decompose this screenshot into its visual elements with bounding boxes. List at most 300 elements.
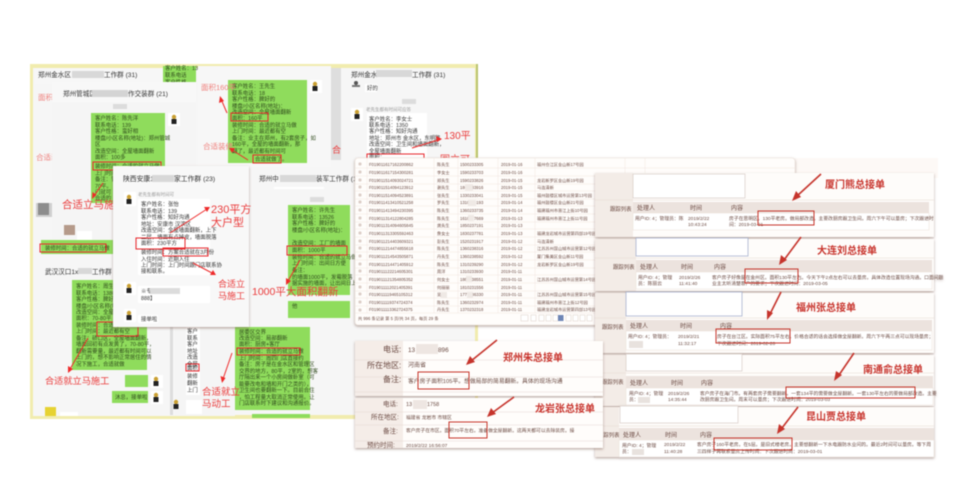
card: 厦门熊总接单: 用户ID: 4；管理员：陈 [635, 215, 684, 222]
panel: order table: 福建福州市晋江上街11号园 [537, 215, 587, 222]
panel: order table: 江苏苏州昆山城市运营第14号园 [537, 276, 596, 283]
chat window: 1000平 group: 郑州中 [259, 174, 279, 183]
message bubble: customer info: 楼盘/小区名称(地址)： [292, 226, 346, 234]
message bubble: 翻新 customer: 上门时间：周四门店直接约 [239, 354, 304, 362]
arrow: red [170, 207, 210, 233]
message bubble: customer info: 联系电话：13526 [292, 213, 334, 221]
chat window: lower middle group: 装修 [187, 372, 198, 380]
label: 130平: 130平 [444, 131, 471, 142]
panel: order table: 2019-01-11 [501, 307, 523, 312]
card: 福州张总接单: 房子在台江区。实际面积75平左右。价格合适的话会选择做全屋翻新。周六下午两三点可以现场量房； [717, 333, 933, 340]
card: 郑州朱总接单: 备注: [383, 374, 401, 384]
panel: order table: 1370232318 [460, 307, 484, 312]
arrow: 南通俞 [834, 353, 854, 381]
card: 大连刘总接单: 跟踪列表 [613, 263, 635, 271]
label: 230平方大户型: 230平方 [211, 202, 251, 216]
panel: order table: 郑先生 [437, 177, 450, 184]
message bubble: customer info: 联系电话：1380 [76, 289, 115, 297]
message bubble: customer info: 地址：郑州市 金水区，东明路 [369, 134, 441, 142]
text area [620, 406, 738, 423]
arrow: 厦门熊 [792, 174, 821, 201]
chat window: 王先生 bubble: 翻了，最近都有时间可 [232, 147, 287, 155]
chat window: 郑州金水区 right [331, 68, 474, 161]
icon: avatar [351, 108, 363, 121]
chat window: 1000平 group: 他 [292, 302, 298, 310]
message bubble: customer info: 装修时间：方案合适就在3月份 [141, 248, 215, 256]
message bubble: customer info: 的墙面1000平，发霉脱落 [292, 273, 353, 281]
message bubble: customer info: 客户性格：脾好的 [292, 219, 335, 227]
title: 昆山贾总接单: 昆山贾总接单 [806, 410, 866, 423]
card: 昆山贾总接单: 用户ID: 4；管理 [622, 442, 656, 449]
panel: order table: 张先生 [437, 192, 450, 199]
panel: window backing behind cards [598, 175, 930, 455]
icon: avatar [124, 282, 136, 295]
panel: order table: 1590233826 [460, 178, 484, 183]
card: 大连刘总接单: 用户ID: 4；管理 [638, 274, 672, 281]
table header: 时间 [671, 379, 683, 387]
checkboxes [358, 162, 362, 312]
card: 南通俞总接单: 客户房子在海门市。有两套房子需要翻新。一套134平的需要做全屋翻新。一套130平左右的要做局部改造。主要 [700, 390, 937, 397]
panel: order table: F019011314122804285 [369, 216, 414, 221]
chat window: top left group: 郑州金水区 [38, 70, 71, 79]
panel: order table: 2019-01-11 [501, 300, 523, 305]
panel: order table: 2019-01-16 [501, 162, 523, 167]
panel: order table: F019011314094605845 [369, 223, 414, 228]
card: 大连刘总接单: 业主太听清楚客户的要求；下次跟进时间：2019-03-05 [712, 280, 828, 287]
card: 福州张总接单: 跟踪列表 [602, 323, 624, 331]
panel: order table: 龚先生 [437, 222, 450, 229]
table header: 内容 [714, 263, 726, 271]
panel: order table: F019011122214605301 [369, 269, 414, 274]
highlight box [716, 329, 790, 343]
message bubble: customer info: 楼盘/小区名称(地 [76, 302, 118, 310]
panel: order table: 詹女士 [437, 230, 450, 237]
message bubble: customer info: 装修时间：合适的就立马做 [292, 253, 357, 261]
chat thumbnail [64, 225, 75, 235]
panel: order table: 1770236330 [460, 292, 484, 297]
card: 厦门熊总接单: 间：2019-03-01 [729, 221, 763, 228]
icon: avatar [310, 80, 322, 93]
card: 大连刘总接单: 11:41:40 [679, 281, 698, 287]
message bubble: 翻新 customer: 能要改电和墙和开门之类的）， [239, 380, 312, 388]
icon: avatar [168, 113, 180, 126]
table header: 内容 [720, 322, 732, 330]
chat window: lower middle group: 改造 [187, 353, 198, 361]
green message strip behind window: 楼盘/小区 [165, 85, 189, 93]
chat window: 王先生 bubble: 楼盘/小区名称(地址)： [232, 102, 286, 110]
green message strip behind window: 联系电话 [165, 71, 187, 79]
phone number masks [441, 184, 476, 298]
card: 龙岩张总接单: 预约时间: [367, 440, 395, 449]
message bubble: 翻新 customer: 居委区交界 [239, 328, 267, 336]
arrow: 郑州朱 [466, 340, 497, 365]
green message strip behind window: 客户性格 [165, 78, 187, 86]
chat window: 郑州金水区 right: 工作群 (31) [412, 70, 445, 79]
panel: order table: 1500233305 [460, 162, 484, 167]
message bubble: customer info [367, 113, 444, 161]
card: 大连刘总接单: 员：陈丽云 [638, 280, 662, 287]
panel: order table: 1360238316 [460, 246, 484, 251]
chat window: lower middle group: 面积 [187, 365, 198, 372]
chat window: 武汉汉口 group: 工作群 [92, 267, 112, 276]
table header [633, 202, 929, 213]
panel: order table: F019011514093024721 [369, 178, 414, 183]
chat window: lower middle group: 客户 [187, 340, 198, 348]
table header: 内容 [701, 379, 713, 387]
panel: order table: 陈先生 [437, 161, 450, 168]
panel: order table: 1360238592 [460, 254, 484, 259]
table header [626, 320, 932, 331]
arrow: 大连刘 [779, 237, 801, 265]
panel: order table: 1860233916 [460, 185, 484, 190]
text area [626, 354, 742, 371]
label: 合适就立马动工: 合适就立 [202, 386, 240, 398]
icon: avatar [174, 400, 178, 409]
message bubble: customer info: 改造空间：全屋墙面翻新 [95, 147, 155, 155]
card: 厦门熊总接单 [595, 173, 934, 237]
message bubble: 翻新 customer: 门店联系时下建议和沟通报价。 [239, 399, 314, 407]
panel: order table: F019011214543505871 [369, 254, 414, 259]
message bubble: customer info: 改造空间：全屋墙面翻新，上下 [141, 226, 217, 234]
message bubble: customer info: 客户性格：蛮好相 [95, 127, 138, 135]
panel: order table: F019011113362724375 [369, 307, 413, 312]
green message strip behind window: 装修时间 [165, 106, 187, 114]
panel: order table: 马连清新 [537, 184, 554, 191]
card: 郑州朱总接单 [355, 341, 603, 396]
title: 南通俞总接单: 南通俞总接单 [863, 363, 923, 376]
chat window: 陕西安康 group: 家工作群 (23) [174, 174, 215, 183]
message bubble: customer info: 客户姓名：张怡 [141, 200, 179, 208]
panel: order table: 2019-01-14 [501, 200, 523, 205]
chat window: top left group: 工作群 (31) [104, 70, 137, 79]
chat window: 郑州管城区 group [38, 82, 196, 246]
table header: 时间 [665, 431, 677, 439]
panel: order table: 1310233193 [460, 200, 484, 205]
chat window: 郑州金水区 right: 老先生都有时间可应答 [366, 106, 411, 113]
card: 南通俞总接单: 2019/2/26 [668, 391, 690, 397]
card: 厦门熊总接单: 房子在思明区。130平老房。做局部改造。主要改厨房跟卫生间。周六下午可以量房；下次跟进时 [729, 215, 934, 222]
panel: order table: 丹先生 [437, 306, 450, 313]
panel: order table: F019011617162200862 [369, 162, 414, 167]
message bubble: customer info: 上门时间 [95, 169, 117, 177]
card: 龙岩张总接单: 客户房子在市区。面积70平左右。准备做全屋翻新。这两天都可以去除装房。接 [406, 427, 575, 434]
table header: 内容 [700, 431, 712, 439]
message bubble: customer info: 装修时间：合适的 [76, 321, 119, 329]
panel: order table: 1590233703 [460, 170, 484, 175]
panel: order table: F019011413410521258 [369, 200, 414, 205]
chat window: 王先生 bubble: 客户姓名：王先生 [232, 82, 276, 90]
panel: order table: F019011119374724374 [369, 300, 413, 305]
arrow: red [68, 338, 88, 373]
panel: order table: 江苏苏州昆山城市运营第12号园 [537, 245, 596, 252]
chat window: 1000平 group: 装军工作群 (1 [316, 174, 357, 183]
message bubble: customer info [287, 205, 357, 295]
label: 合适立马施工: 合适立 [218, 278, 245, 289]
chat window: 王先生 bubble: 客户性格：脾好的 [232, 95, 275, 103]
panel: order table: 1330233041 [460, 193, 484, 198]
card: 昆山贾总接单: 客户房子160平老房。在5层。是旧式楼老房。主要想翻新一下水电跟防水业问的。最近2时间可以量房。等下周 [697, 441, 931, 448]
card: 郑州朱总接单: 896 [438, 347, 449, 354]
panel: order table: F019011514094123912 [369, 185, 414, 190]
chat window: lower middle group: 上门 [187, 386, 198, 394]
panel: order table: F019011514094523891 [369, 193, 414, 198]
message bubble: customer info: 客户姓名：周生 [76, 282, 114, 290]
highlight box [745, 269, 798, 283]
panel: order table: 2019-01-12 [501, 239, 523, 244]
message bubble: customer info: 墙面回初有点发黄了，70-80平， [76, 340, 154, 348]
panel: pale backdrop top right [795, 158, 938, 178]
highlight box [449, 422, 487, 438]
label: 230平方大户型: 大户型 [211, 215, 244, 229]
message bubble: customer info: 面积：70-80平 [76, 315, 112, 322]
message bubble: customer info: 上门时间：最近都有空 [76, 327, 130, 335]
message bubble: customer info: 改造空间：卫生间和墙面翻新， [369, 140, 444, 148]
message bubble: customer info: 客户性格：脾好好 [76, 295, 120, 303]
label: 1000平大面积翻新: 1000平大面积翻新 [252, 285, 339, 298]
message bubble: customer info [72, 280, 154, 370]
table header [636, 260, 932, 272]
panel: order table: 吴 [437, 292, 441, 298]
chat window: lower middle group [174, 327, 235, 416]
table header: 处理人 [623, 431, 641, 439]
chat window: top left group: 面积1 [38, 92, 57, 102]
icon: avatar [151, 391, 163, 404]
panel: order table: 何女士 [437, 276, 450, 283]
label: 合适立马施工: 马施工 [218, 290, 245, 301]
label: 面积160平: 面积160平 [201, 82, 237, 92]
icon: avatar [124, 192, 136, 206]
table header: 内容 [731, 204, 743, 212]
message bubble: customer info: 联系电话：139 [95, 121, 131, 129]
message bubble: customer info: 地址：安康市 汉滨区 [141, 220, 192, 228]
table header: 时间 [680, 322, 692, 330]
card: 福州张总接单: 用户ID: 4；管理员： [628, 333, 672, 340]
chat window: 武汉汉口 group: 装修时间：合适的就立马做 [45, 244, 110, 252]
message bubble: customer info: 联系电话：1350 [369, 121, 408, 129]
highlight box [786, 387, 915, 398]
table header [619, 428, 934, 440]
panel: order table: 2019-01-11 [501, 285, 523, 290]
message bubble: customer info: 70平。 [95, 183, 112, 190]
message bubble: customer info: 全屋墙面翻新 [369, 147, 402, 155]
panel: order table: 丹先生 [437, 253, 450, 260]
message bubble: customer info: 客户性格：知好沟通 [141, 213, 190, 221]
arrow: red [92, 183, 103, 199]
message bubble: customer info: 改造空间：全屋墙 [76, 308, 120, 316]
message bubble: 翻新 customer: 卫生间也要翻新一下。目前合住 [239, 386, 315, 394]
chat window: 郑州管城区 group: 郑州管城区 [63, 89, 96, 98]
card: 大连刘总接单: 2019/2/26 [679, 275, 701, 281]
panel: order table: F019011121354805352 [369, 277, 414, 282]
card: 南通俞总接单: 14:35:44 [668, 397, 687, 403]
message bubble: customer info: 改造空间：工厂的墙面 [292, 239, 347, 247]
green message strip behind window: 上门时间 [165, 113, 187, 121]
green message strip behind window: 改造 [165, 134, 176, 142]
panel: order table: 2019-01-15 [501, 178, 523, 183]
table header: 时间 [681, 263, 693, 271]
card: 龙岩张总接单 [355, 398, 603, 449]
text area [633, 174, 745, 198]
message bubble: customer info [136, 199, 222, 275]
message bubble: customer info: 面积： [369, 154, 385, 161]
message bubble: customer info: 楼盘/小区名称(地址)：郑州管城 [95, 134, 171, 142]
chat window: 陕西安康 group: ※专 [141, 287, 152, 295]
panel: order table: F019011112021405391 [369, 285, 413, 290]
message bubble: customer info: 据实施的墙面，让出间日上 [292, 279, 357, 287]
card: 厦门熊总接单: 10:43:24 [688, 222, 707, 228]
message bubble: customer info: 联系电话：139 [141, 207, 177, 215]
highlight box [714, 438, 792, 450]
highlight box [418, 372, 469, 389]
panel: order table: 2019-01-16 [501, 170, 523, 175]
table header: 时间 [690, 204, 702, 212]
green message strip behind window: 改造空间 [165, 92, 187, 100]
panel: order table: 2019-01-13 [501, 216, 523, 221]
card: 福州张总接单 [595, 292, 934, 353]
card: 昆山贾总接单: 11:40:28 [664, 449, 683, 455]
chat window: 王先生 bubble: 联系电话：18 [232, 89, 265, 97]
panel: order table: 2019-01-11 [501, 269, 523, 274]
panel: order table: 福建龙岩城市运营第四部19号园 [537, 230, 596, 237]
message bubble: customer info: 备注：硚口区，全屋墙面翻新， [76, 334, 151, 342]
panel: order table: 1810231556 [460, 285, 484, 290]
message bubble: 翻新 customer: 装修时间：合适的就立马做 [239, 347, 304, 355]
chat window: 王先生 bubble: 装修时间：合适的就立马做 [232, 121, 297, 129]
card: 郑州朱总接单: 电话: [383, 344, 401, 354]
message bubble: customer info: 上门时间：出间日方便 [292, 259, 347, 267]
card: 郑州朱总接单: 所在地区: [367, 360, 401, 370]
panel: order table: 谢先生 [437, 184, 450, 191]
icon: avatar [352, 81, 360, 87]
arrow: red [219, 96, 227, 113]
text area [626, 292, 742, 316]
title: 郑州朱总接单: 郑州朱总接单 [503, 351, 563, 364]
message bubble: customer info: 翻新需要量，最近都有时间可以 [76, 347, 152, 355]
panel: order table: 李女士 [437, 169, 450, 176]
card: 龙岩张总接单: 福建省 龙岩市 市辖区 [406, 414, 452, 421]
panel: order table: 陈先生 [437, 215, 450, 222]
panel: order table: 1310233930 [460, 269, 484, 274]
card: 郑州朱总接单: 客户房子面积105平。想做局部的简易翻新。具体的现场沟通 [408, 377, 563, 385]
table footer: 共 996 条记录 第 5 页/共 34 页，每页 29 条 [358, 315, 439, 322]
table header: 处理人 [630, 322, 648, 330]
green message strip behind window: 客户姓名：138 [165, 64, 201, 72]
panel: order table: F019011119465105312 [369, 292, 413, 297]
panel: order table: 福建龙岩城市运营第四部13号园 [537, 306, 596, 313]
message bubble: customer info: 客户姓名：陈先洋 [95, 114, 139, 122]
chat window: 郑州金水区 right: 好的 [367, 84, 378, 92]
message bubble: customer info: 备注： [292, 266, 308, 274]
label: 合适立马施工: 合适立马施 [62, 198, 115, 211]
message bubble: customer info: 客户性格：知好沟通 [369, 127, 418, 135]
message bubble: customer info: 合适的 [95, 194, 111, 202]
message bubble: customer info: 二层，墙面有点掉皮，墙面脱落 [141, 233, 217, 241]
highlight box [758, 211, 814, 225]
panel: order table: 2019-01-12 [501, 254, 523, 259]
message bubble: 翻新 customer: 厅隔出来一个小房间做卧室（可 [239, 373, 315, 381]
panel: order table: F019011617154300281 [369, 170, 414, 175]
panel: order table: 厦门集美区金山新11号园 [537, 253, 583, 260]
card: 龙岩张总接单: 备注: [383, 426, 398, 435]
message bubble: 翻新 customer: ，怕工程量大取消正常使用。让 [239, 393, 315, 401]
chat window: 王先生 bubble: 改造空间：全屋墙面翻新 [232, 108, 292, 116]
message bubble: customer info: 上门时间：上门时间跟门店联系协 [141, 261, 222, 269]
message bubble: 翻新 customer [235, 327, 319, 410]
title: 福州张总接单: 福州张总接单 [796, 301, 856, 314]
table header: 处理人 [640, 263, 658, 271]
card: 南通俞总接单: 改厨房跟卫生间。周末可以量房；下次跟进时间：2019-03-03 [700, 396, 830, 403]
panel: order table: 2019-01-11 [501, 277, 523, 282]
chat window: 郑州金水区 right: 郑州金水 [351, 70, 378, 79]
message bubble: customer info: 入住时间：近期入住 [141, 255, 190, 263]
label: 合适就立马动工: 马动工 [202, 399, 231, 410]
panel: order table: 龙岩新罗区金山新19号园 [537, 261, 584, 268]
panel: order table: 2019-01-13 [501, 223, 523, 228]
green message strip behind window [163, 64, 201, 201]
label: 合适立马施工 [218, 278, 245, 301]
chat window: top left group [35, 68, 165, 217]
arrow: red [193, 263, 216, 275]
message bubble: customer info: 接和联系。 [141, 267, 168, 275]
title: 大连刘总接单: 大连刘总接单 [817, 244, 877, 257]
card: 厦门熊总接单: 跟踪列表 [610, 205, 632, 213]
message bubble: customer info: 备注：管 [95, 175, 117, 183]
panel: order table: 何丽丽 [437, 284, 450, 291]
message bubble: customer info: 况下施工，合适就做 [76, 360, 125, 368]
panel: order table: 1830237781 [460, 231, 484, 236]
arrow: red [412, 136, 442, 148]
message bubble: 翻新 customer: 面积：厨房+客厅 [239, 340, 280, 348]
panel: order table: 江苏苏州昆山城市运营第15号园 [537, 291, 596, 298]
chat window: 王先生 bubble: 上门时间：最近都有空 [232, 127, 286, 135]
green message strip behind window: 面积 [165, 100, 176, 107]
message bubble: customer info: 面积：100多 [95, 153, 126, 161]
card: 郑州朱总接单: 河南省 [408, 361, 426, 369]
chat window: 陕西安康 group: 陕西安康1 [123, 174, 154, 183]
panel: order table: 2019-01-12 [501, 246, 523, 251]
label: 合适就立马施工: 合适就立马施工 [45, 375, 109, 386]
card: 龙岩张总接单: 2019/2/22 16:56:07 [406, 443, 448, 449]
message bubble: customer info: 区 [95, 141, 101, 148]
text area [636, 238, 748, 256]
table header: 处理人 [637, 204, 655, 212]
panel: order table: 1360232974 [460, 300, 484, 305]
panel: order table: 1520231917 [460, 239, 484, 244]
chat window: 武汉汉口 group: 沐总，接单啦 [115, 393, 148, 401]
panel: order table: 陈先生 [437, 245, 450, 252]
message bubble: customer info: 客户姓名：李女士 [369, 115, 413, 123]
panel: order table: 福建福州市晋江上街12号园 [537, 299, 588, 306]
green message strip behind window: 备注 [165, 120, 176, 128]
panel: order table: 1360233735 [460, 208, 484, 213]
label: cut off: 合 [332, 144, 341, 155]
message bubble: customer info: 上门的，想不影响正常居住的情 [76, 353, 152, 361]
title: 厦门熊总接单: 厦门熊总接单 [825, 178, 885, 191]
arrow: red [229, 148, 248, 160]
message bubble: customer info [91, 113, 171, 203]
message bubble: 翻新 customer: 交界的地方，80平，2室的，想客 [239, 367, 319, 375]
card: 昆山贾总接单: 2019/2/22 [664, 442, 686, 448]
card: 昆山贾总接单 [595, 406, 934, 457]
card: 大连刘总接单 [595, 238, 944, 291]
panel: order table: 1850237191 [460, 223, 484, 228]
chat window: lower middle group: 翻新 [187, 379, 198, 387]
card: 大连刘总接单: 客户房子好像是在金州区。面积130平左右。今天下午2点左右可以去量房。具体改造位置现场沟通。口面问题 [712, 274, 944, 281]
card: 南通俞总接单 [595, 354, 937, 406]
panel: order table: F019011413494230395 [369, 208, 414, 213]
green message strip behind window: 楼盘 [165, 127, 176, 135]
chat window: lower middle group: 联系 [187, 334, 198, 342]
